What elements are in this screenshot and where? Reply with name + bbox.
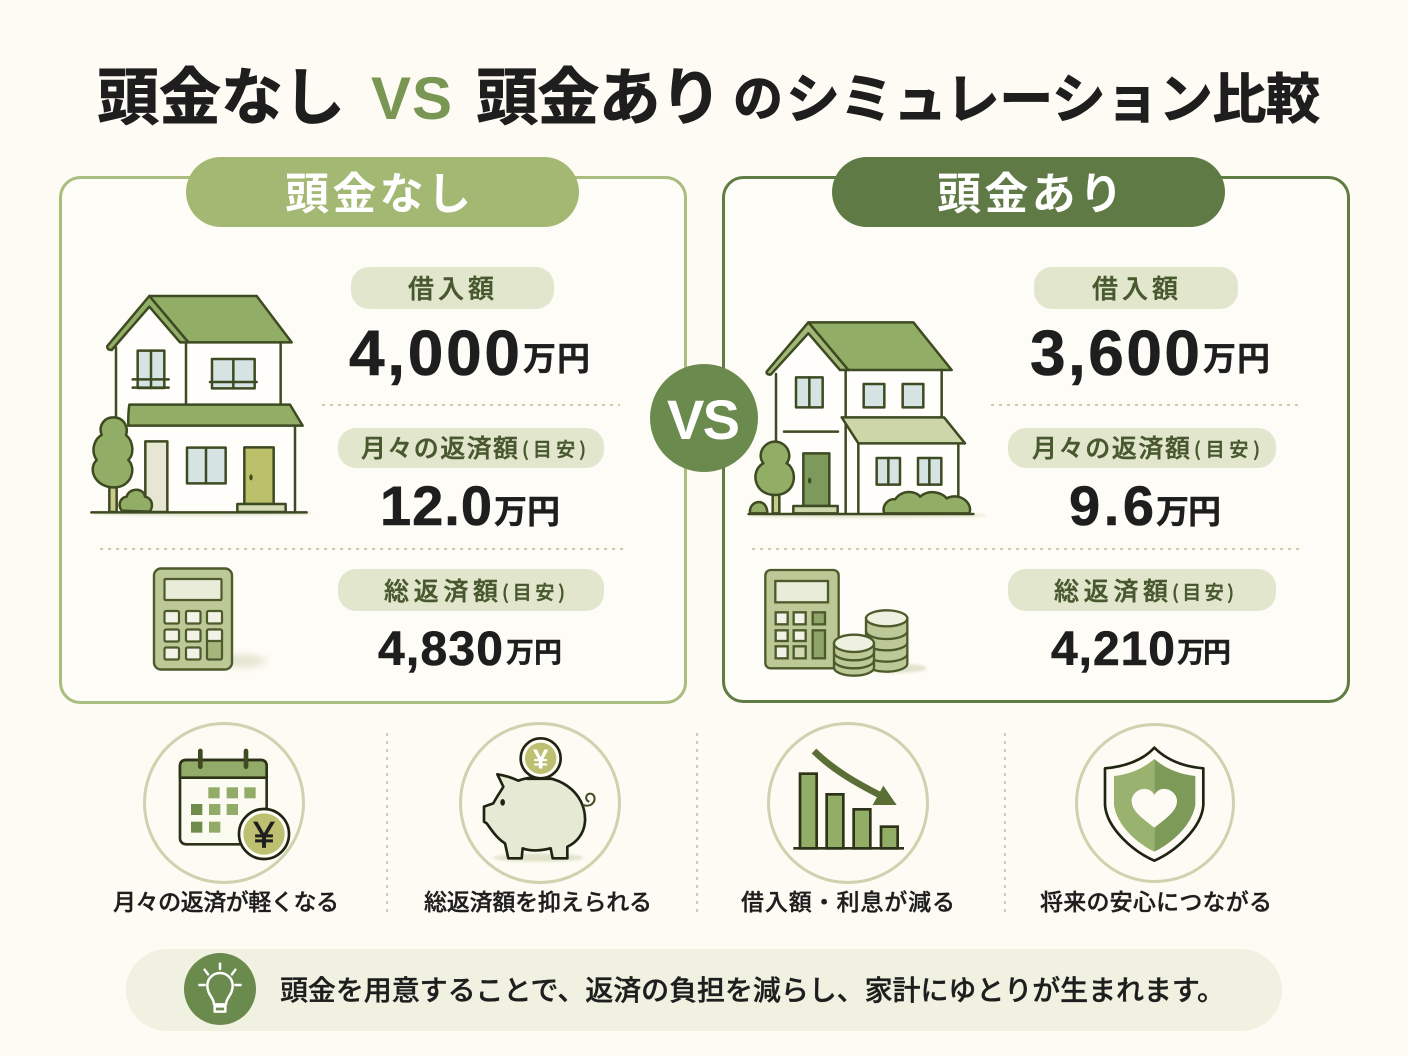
metric: 総返済額 4,830万円: 総返済額 [384, 572, 498, 608]
panel: 頭金なし [60, 157, 686, 702]
title: の [733, 59, 783, 131]
benefit: 将来の安心につながる [1040, 724, 1272, 917]
title: シミュレーション比較 [786, 55, 1320, 134]
panel heading pill: 頭金なし: 頭金なし [285, 158, 471, 222]
metric: 借入額 4,000万円: 万円 [523, 332, 590, 380]
metric: 月々の返済額 9.6万円: 万円 [1156, 485, 1221, 533]
house illustration: no down payment [91, 296, 313, 516]
metric: 月々の返済額 12.0万円 [338, 428, 604, 537]
summary banner [126, 949, 1282, 1031]
metric: 総返済額 4,830万円: 万円 [506, 631, 562, 671]
icon: calendar with yen coin [180, 751, 289, 859]
metric: 総返済額 4,210万円: 4,210 [1051, 623, 1175, 676]
metric: 借入額 4,000万円 [349, 267, 590, 389]
icon: piggy bank with yen coin: ¥ [533, 743, 549, 774]
title [97, 47, 1320, 137]
metric: 月々の返済額 12.0万円: 12.0 [380, 474, 492, 537]
icon: calendar with yen coin: ¥ [253, 814, 275, 856]
title: VS [371, 65, 452, 132]
label: 借入額・利息が減る [741, 883, 955, 917]
calculator icon [154, 568, 266, 670]
summary text: 頭金を用意することで、返済の負担を減らし、家計にゆとりが生まれます。 [280, 969, 1225, 1009]
metric: 月々の返済額 9.6万円: 月々の返済額 [1032, 429, 1190, 465]
metric: 総返済額 4,830万円: 4,830 [378, 623, 503, 676]
benefit: 借入額・利息が減る [741, 724, 955, 917]
label: 総返済額を抑えられる [424, 883, 652, 917]
metric: 総返済額 4,830万円 [338, 569, 604, 676]
metric: 月々の返済額 9.6万円: (目安) [1194, 435, 1260, 462]
title: 頭金あり [476, 47, 722, 137]
metric: 借入額 4,000万円: 借入額 [408, 269, 494, 306]
label: 将来の安心につながる [1040, 883, 1272, 917]
icon: falling bar chart [793, 751, 904, 848]
panel heading pill: 頭金あり [832, 157, 1225, 227]
metric: 総返済額 4,210万円: 総返済額 [1054, 572, 1168, 608]
metric: 総返済額 4,210万円 [1008, 569, 1276, 676]
house illustration: with down payment [747, 322, 987, 518]
metric: 総返済額 4,210万円: 万円 [1177, 631, 1231, 671]
icon: shield with heart [1105, 748, 1203, 861]
title: 頭金なし [97, 47, 345, 137]
metric: 借入額 3,600万円 [1030, 267, 1270, 389]
metric: 月々の返済額 12.0万円: (目安) [522, 435, 586, 462]
metric: 借入額 3,600万円: 3,600 [1030, 317, 1200, 389]
label: 月々の返済が軽くなる [113, 883, 339, 917]
metric: 月々の返済額 12.0万円: 万円 [494, 485, 560, 533]
metric: 借入額 3,600万円: 借入額 [1092, 269, 1178, 306]
panel heading pill: 頭金あり: 頭金あり [937, 158, 1123, 222]
metric: 月々の返済額 9.6万円 [1008, 428, 1276, 537]
benefit: 月々の返済が軽くなる [113, 724, 339, 917]
icon: piggy bank with yen coin [484, 738, 595, 862]
panel heading pill: 頭金なし [186, 157, 579, 227]
metric: 月々の返済額 12.0万円: 月々の返済額 [361, 429, 518, 465]
metric: 月々の返済額 9.6万円: 9.6 [1069, 474, 1154, 537]
panel: 頭金あり [724, 157, 1348, 702]
benefit: 総返済額を抑えられる [424, 724, 652, 917]
metric: 総返済額 4,830万円: (目安) [502, 578, 565, 605]
icon: light bulb [184, 953, 256, 1025]
metric: 借入額 4,000万円: 4,000 [349, 317, 520, 389]
VS badge [650, 364, 758, 472]
metric: 総返済額 4,210万円: (目安) [1172, 578, 1234, 605]
VS badge: VS [667, 388, 740, 451]
calculator and coins icon [765, 570, 927, 676]
metric: 借入額 3,600万円: 万円 [1203, 332, 1270, 380]
